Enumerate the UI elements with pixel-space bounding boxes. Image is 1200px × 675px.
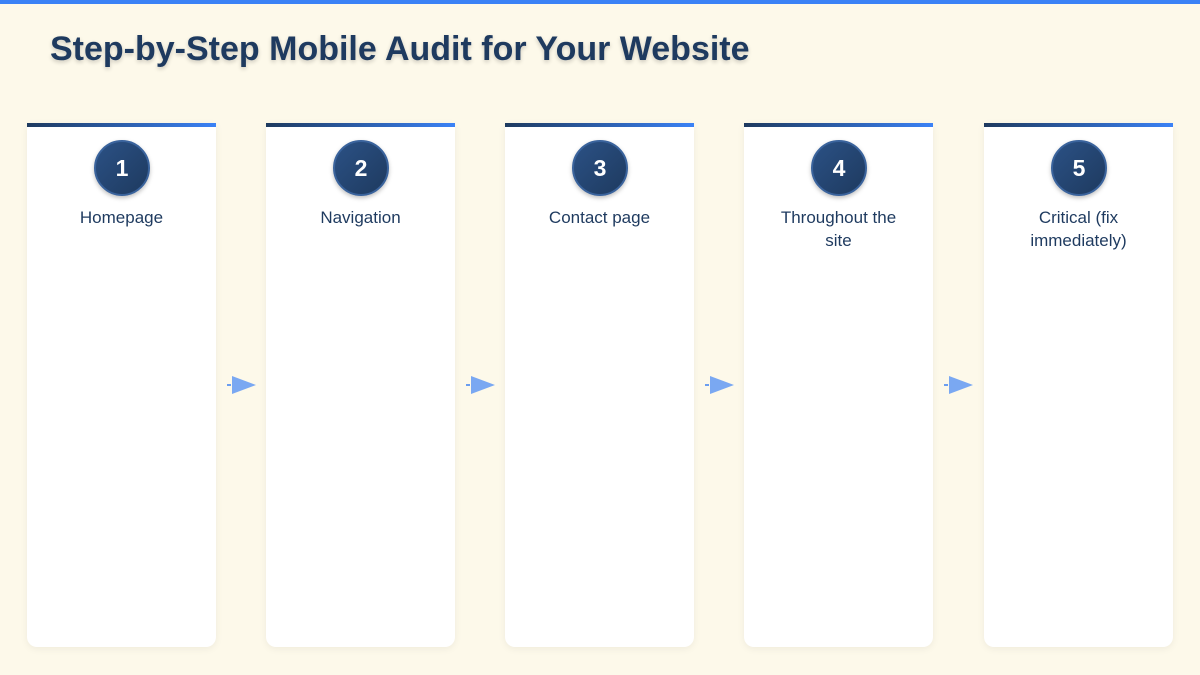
arrow 2 (466, 376, 495, 394)
badge 4: 4 (833, 155, 845, 181)
label 4: Throughout the site (781, 208, 896, 250)
badge 2: 2 (355, 155, 367, 181)
title: Step-by-Step Mobile Audit for Your Website (50, 30, 750, 68)
panel: step 2 (266, 123, 455, 647)
panel: step 1 (27, 123, 216, 647)
label 2: Navigation (320, 208, 401, 227)
panel: step 3 (505, 123, 694, 647)
panel: step 4 (744, 123, 933, 647)
badge 5: 5 (1073, 155, 1085, 181)
badge 1: 1 (116, 155, 128, 181)
label 3: Contact page (549, 208, 650, 227)
arrow 1 (227, 376, 256, 394)
arrow 3 (705, 376, 734, 394)
arrow 4 (944, 376, 973, 394)
panel: step 5 (984, 123, 1173, 647)
label 5: Critical (fix immediately) (1030, 208, 1127, 250)
label 1: Homepage (80, 208, 163, 227)
badge 4 (811, 140, 867, 196)
badge 2 (333, 140, 389, 196)
badge 1 (94, 140, 150, 196)
badge 5 (1051, 140, 1107, 196)
badge 3: 3 (594, 155, 606, 181)
badge 3 (572, 140, 628, 196)
